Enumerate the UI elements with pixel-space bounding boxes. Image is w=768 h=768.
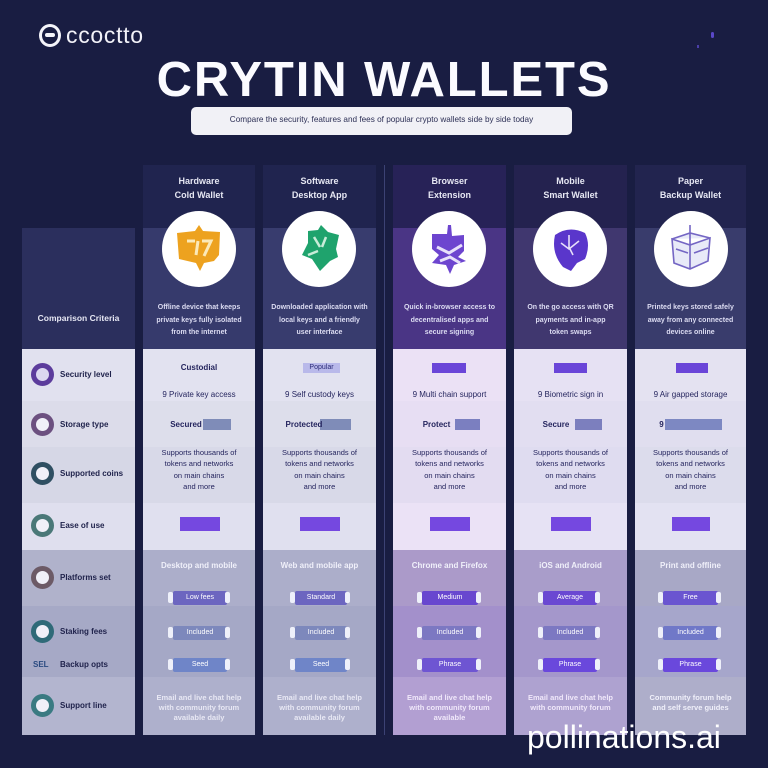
storage text: Secured <box>170 420 202 429</box>
value: detail: 9 Air gapped storage <box>654 390 727 399</box>
chip: a <box>295 591 347 605</box>
description: On the go access with QR <box>527 304 614 311</box>
button <box>300 517 340 531</box>
description: token swaps <box>549 329 592 336</box>
chip: c <box>422 658 478 672</box>
icon: violet wallet <box>533 211 607 287</box>
button <box>180 517 220 531</box>
chip: b <box>173 626 227 640</box>
icon: outline wallet <box>654 211 728 287</box>
subtitle pill <box>191 107 572 135</box>
row label: platforms: Platforms set <box>60 573 111 582</box>
description <box>647 304 734 336</box>
icon: logo mark <box>39 24 61 47</box>
value: coin text: on main chains <box>665 471 716 480</box>
support text: and self serve guides <box>652 703 729 712</box>
chip: a: Medium <box>438 594 462 601</box>
icon: green wallet <box>282 211 356 287</box>
value: coin text <box>161 448 237 491</box>
row label: backup: SEL <box>33 660 49 669</box>
support text: available <box>434 713 465 722</box>
value: coin text: and more <box>434 482 465 491</box>
value: storage bar <box>665 419 722 430</box>
description: from the internet <box>171 329 227 336</box>
wallet name <box>292 176 347 200</box>
value: security: Custodial <box>181 363 217 372</box>
row label: storage <box>31 413 108 436</box>
row label: backup: Backup opts <box>60 660 108 669</box>
wallet name: Paper <box>678 176 703 186</box>
panel: wallet 2 <box>263 165 376 735</box>
value: coin text: Supports thousands of <box>653 448 728 457</box>
row label: interface: Ease of use <box>60 521 104 530</box>
wallet name: Mobile <box>556 176 585 186</box>
row label: security: Security level <box>60 370 112 379</box>
support text: available daily <box>294 713 345 722</box>
logo wordmark: ccoctto <box>66 22 144 48</box>
support text: with community forum <box>409 703 490 712</box>
value: coin text: Supports thousands of <box>282 448 357 457</box>
value: coin text: on main chains <box>424 471 475 480</box>
title: CRYTIN WALLETS <box>157 53 611 107</box>
value: security <box>676 363 708 373</box>
chip row 5 text: Chrome and Firefox <box>412 561 487 570</box>
icon: purple wallet <box>412 211 486 287</box>
chip: b <box>663 626 718 640</box>
chip: b <box>295 626 347 640</box>
support text: Email and live chat help <box>156 693 242 702</box>
description: away from any connected <box>648 316 733 324</box>
description: private keys fully isolated <box>156 316 242 324</box>
value: storage bar <box>320 419 351 430</box>
chip: b: Included <box>187 629 213 636</box>
support text <box>407 693 492 722</box>
support text: Email and live chat help <box>277 693 362 702</box>
chip: c <box>543 658 597 672</box>
description: devices online <box>666 329 715 336</box>
wallet name: Backup Wallet <box>660 190 721 200</box>
chip: b <box>422 626 478 640</box>
chip: c: Phrase <box>439 661 461 668</box>
panel: row labels <box>22 228 135 735</box>
description: user interface <box>297 329 342 336</box>
storage text: 9 <box>659 420 664 429</box>
wallet name: Extension <box>428 190 471 200</box>
description <box>156 304 242 336</box>
chip: b: Included <box>437 629 463 636</box>
watermark: pollinations.ai <box>527 719 721 755</box>
wallet name <box>660 176 721 200</box>
center divider <box>384 165 385 735</box>
value: coin text: tokens and networks <box>415 459 484 468</box>
value: detail: 9 Multi chain support <box>413 390 486 399</box>
row label: storage: Storage type <box>60 420 108 429</box>
description <box>271 304 368 336</box>
description: decentralised apps and <box>411 316 488 324</box>
row label: support <box>31 694 107 717</box>
button <box>430 517 470 531</box>
storage text: Secure <box>543 420 569 429</box>
description: Quick in-browser access to <box>404 304 495 311</box>
wallet name: Hardware <box>178 176 220 186</box>
chip: c: Seed <box>313 661 329 668</box>
heading: features: Comparison Criteria <box>38 313 119 323</box>
chip: c <box>663 658 718 672</box>
storage text: Protect <box>423 420 450 429</box>
storage text: Protected <box>286 420 322 429</box>
chip: b: Included <box>557 629 583 636</box>
support text: with community forum <box>159 703 239 712</box>
value: coin text <box>412 448 487 491</box>
chip: c <box>173 658 227 672</box>
chip row 5 text: Desktop and mobile <box>161 561 237 570</box>
chip: a: Average <box>557 594 583 601</box>
wallet name <box>543 176 598 200</box>
chip: c: Phrase <box>679 661 702 668</box>
chip row 5 text: Print and offline <box>660 561 721 570</box>
value: storage bar <box>575 419 602 430</box>
panel: wallet 1 <box>143 165 255 735</box>
support text <box>649 693 732 712</box>
row label: staking: Staking fees <box>60 627 107 636</box>
chip: a <box>543 591 597 605</box>
value: coin text: tokens and networks <box>165 459 233 468</box>
value: security <box>432 363 466 373</box>
chip row 5 text: Web and mobile app <box>281 561 358 570</box>
value: coin text: on main chains <box>174 471 224 480</box>
value: detail: 9 Private key access <box>162 390 236 399</box>
row label: staking <box>31 620 107 643</box>
chip: c: Phrase <box>559 661 581 668</box>
support text <box>277 693 362 722</box>
value: coin text: and more <box>183 482 215 491</box>
row label: coins: Supported coins <box>60 469 123 478</box>
value: security <box>554 363 587 373</box>
button <box>551 517 591 531</box>
row label: interface <box>31 514 104 537</box>
wallet name: Browser <box>431 176 468 186</box>
support text: available daily <box>174 713 224 722</box>
panel: wallet 4 <box>514 165 627 735</box>
logo <box>39 22 144 48</box>
chip: a <box>663 591 718 605</box>
value: coin text: and more <box>675 482 706 491</box>
support text: with community forum <box>279 703 360 712</box>
support text <box>156 693 242 722</box>
wallet name: Cold Wallet <box>175 190 223 200</box>
chip: a <box>173 591 227 605</box>
subtitle pill: Compare the security, features and fees of popular crypto wallets side by side today <box>230 115 533 124</box>
description: secure signing <box>425 329 474 336</box>
chip row 5 text: iOS and Android <box>539 561 602 570</box>
value: coin text: Supports thousands of <box>161 448 237 457</box>
value: coin text: Supports thousands of <box>412 448 487 457</box>
value: coin text <box>653 448 728 491</box>
chip: a: Standard <box>307 594 335 601</box>
wallet name <box>428 176 471 200</box>
description <box>527 304 614 336</box>
wallet name <box>175 176 224 200</box>
chip: c: Seed <box>192 661 208 668</box>
value: coin text: on main chains <box>545 471 596 480</box>
panel: wallet 3 <box>393 165 506 735</box>
wallet name: Desktop App <box>292 190 347 200</box>
chip: c <box>295 658 347 672</box>
decorative sparkle <box>697 32 714 48</box>
value: coin text: and more <box>555 482 586 491</box>
panel: wallet 5 <box>635 165 746 735</box>
value: coin text: tokens and networks <box>536 459 605 468</box>
description: Printed keys stored safely <box>647 304 734 311</box>
value: coin text <box>533 448 608 491</box>
description: Downloaded application with <box>271 304 368 311</box>
chip: b: Included <box>677 629 704 636</box>
description <box>404 304 495 336</box>
chip: b: Included <box>308 629 334 636</box>
icon: orange wallet <box>162 211 236 287</box>
wallet name: Software <box>300 176 338 186</box>
chip: a <box>422 591 478 605</box>
chip: a: Free <box>683 594 698 601</box>
value: coin text: tokens and networks <box>285 459 354 468</box>
button <box>672 517 710 531</box>
row label: security <box>31 363 112 386</box>
support text: Community forum help <box>649 693 732 702</box>
value: detail: 9 Self custody keys <box>285 390 354 399</box>
description: payments and in-app <box>535 316 606 324</box>
support text: Email and live chat help <box>407 693 492 702</box>
value: coin text: on main chains <box>294 471 345 480</box>
value: storage bar <box>203 419 231 430</box>
wallet name: Smart Wallet <box>543 190 598 200</box>
value: coin text <box>282 448 357 491</box>
value: coin text: tokens and networks <box>656 459 725 468</box>
chip: b <box>543 626 597 640</box>
value: detail: 9 Biometric sign in <box>538 390 603 399</box>
description: Offline device that keeps <box>158 304 240 311</box>
row label: coins <box>31 462 123 485</box>
chip: a: Low fees <box>186 594 214 601</box>
support text <box>528 693 613 712</box>
value: coin text: Supports thousands of <box>533 448 608 457</box>
support text: Email and live chat help <box>528 693 613 702</box>
support text: with community forum <box>530 703 611 712</box>
value: storage bar <box>455 419 480 430</box>
value: coin text: and more <box>304 482 335 491</box>
value: security: Popular <box>309 364 334 371</box>
row label: backup <box>33 660 108 669</box>
row label: platforms <box>31 566 111 589</box>
value: security <box>303 363 340 373</box>
row label: support: Support line <box>60 701 107 710</box>
description: local keys and a friendly <box>279 316 360 324</box>
